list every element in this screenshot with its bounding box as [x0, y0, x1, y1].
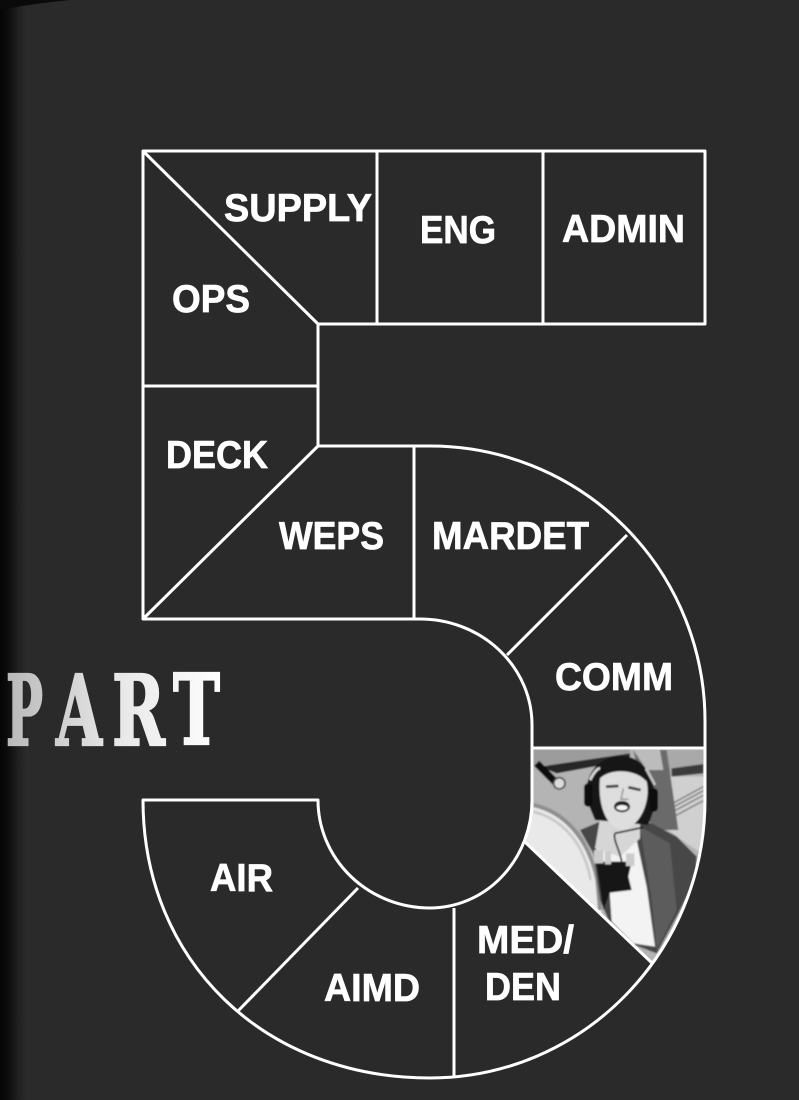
neck equipment [596, 862, 632, 910]
department dividers [143, 151, 705, 1078]
heading: PART: R [112, 654, 166, 768]
photo: sailor wearing headset [526, 750, 704, 961]
label: ADMIN: ADMIN [562, 208, 685, 251]
mic stand [537, 763, 555, 782]
outer outline of the numeral 5 [143, 151, 705, 1078]
department labels [166, 187, 685, 1010]
heading: PART [6, 653, 220, 768]
label: MED/ DEN [477, 919, 574, 1009]
hatch dome [526, 804, 602, 913]
heading: PART: T [173, 653, 220, 767]
label: DECK: DECK [166, 434, 268, 477]
heading: PART: A [55, 654, 103, 768]
label: AIMD: AIMD [324, 967, 420, 1010]
mouth [614, 801, 630, 812]
neck [595, 818, 640, 857]
wall [533, 750, 704, 961]
label: COMM: COMM [555, 656, 673, 699]
label: ENG: ENG [420, 209, 496, 252]
right wall with cables [668, 776, 704, 852]
heading: PART: P [6, 654, 43, 768]
label: OPS: OPS [172, 278, 250, 321]
numeral 5 outline with department dividers [143, 151, 705, 1078]
label: MED/ DEN: MED/ [477, 919, 574, 962]
label: MARDET: MARDET [432, 515, 589, 558]
headset [590, 768, 600, 780]
white shirt [595, 840, 655, 947]
label: SUPPLY: SUPPLY [224, 187, 372, 230]
jacket [580, 822, 697, 953]
eyes [606, 786, 641, 790]
label: MED/ DEN: DEN [485, 966, 561, 1009]
hair [586, 756, 655, 825]
label: WEPS: WEPS [279, 515, 384, 558]
face [600, 771, 648, 830]
dark drapery behind head [633, 750, 678, 830]
label: AIR: AIR [210, 857, 273, 900]
